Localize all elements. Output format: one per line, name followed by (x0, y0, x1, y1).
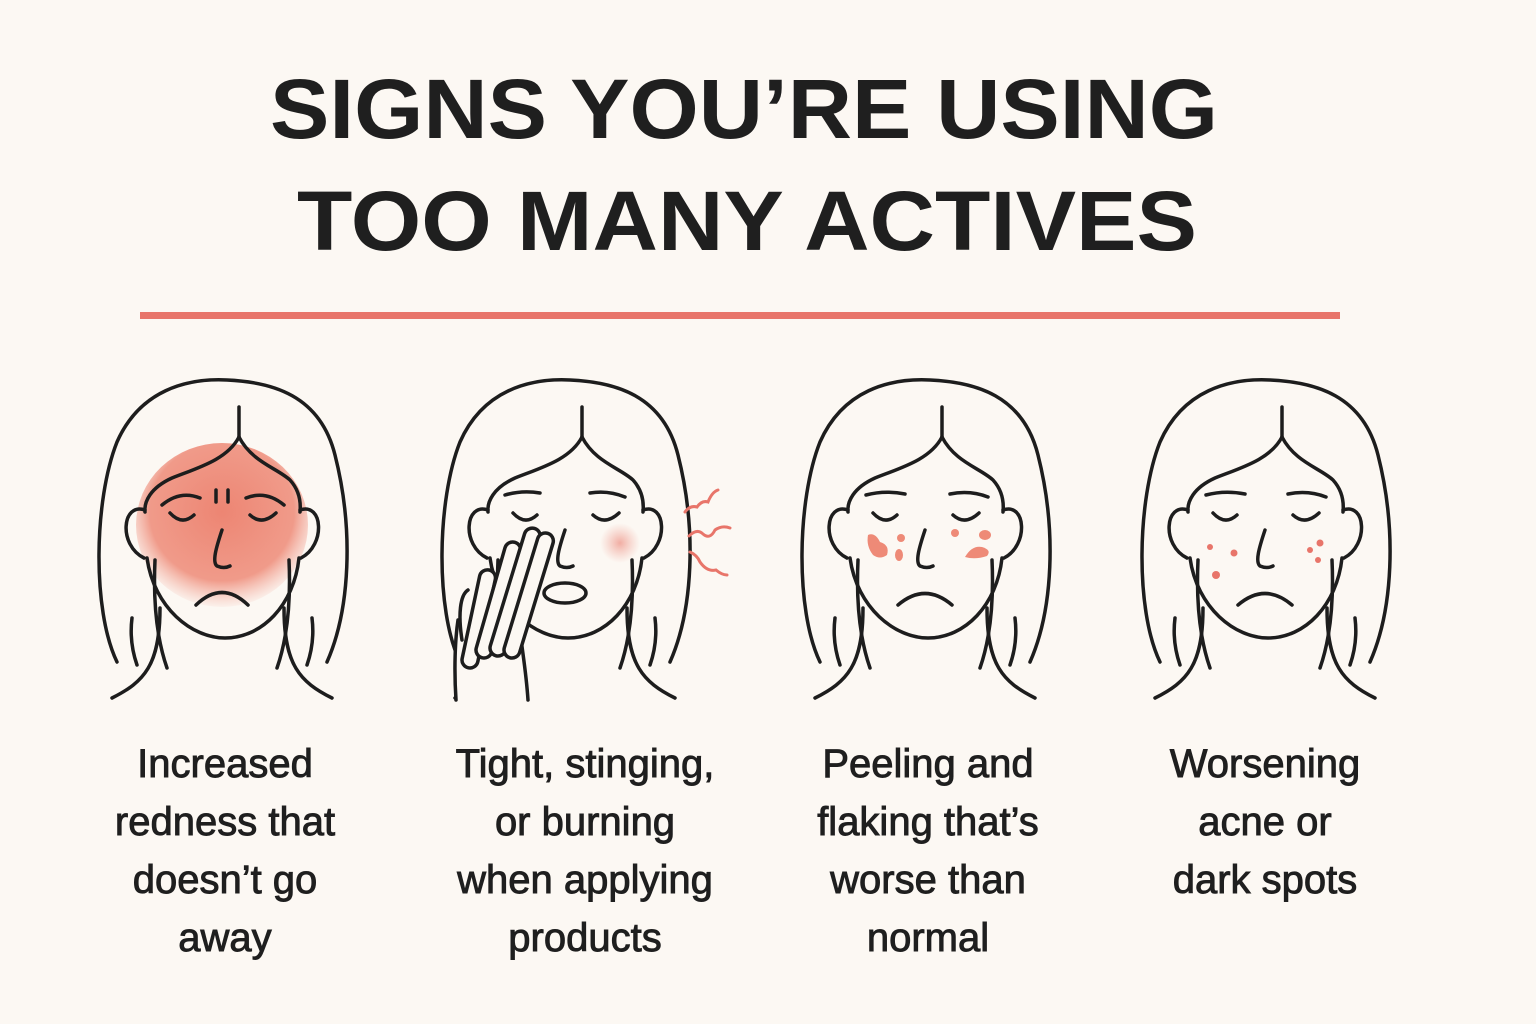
caption: redness that (115, 800, 335, 844)
divider line (140, 312, 1340, 319)
panel: stinging (442, 380, 730, 960)
caption: worse than (829, 858, 1026, 902)
caption: flaking that’s (817, 800, 1039, 844)
caption (115, 742, 335, 960)
icon: sting squiggles (685, 490, 730, 575)
caption: normal (867, 916, 989, 960)
acne dots (1207, 540, 1324, 579)
caption: away (178, 916, 272, 960)
caption: dark spots (1173, 858, 1357, 902)
flaking patches (868, 529, 991, 561)
title: TOO MANY ACTIVES (297, 174, 1197, 268)
caption (1170, 742, 1360, 902)
panel: redness (99, 380, 347, 960)
caption: Increased (137, 742, 313, 786)
caption: doesn’t go (133, 858, 317, 902)
icon: hand (455, 526, 555, 700)
caption: Worsening (1170, 742, 1360, 786)
blush (600, 523, 640, 563)
caption (456, 742, 714, 960)
caption: when applying (456, 858, 713, 902)
caption: Tight, stinging, (456, 742, 714, 786)
caption: Peeling and (822, 742, 1034, 786)
redness overlay (136, 443, 308, 607)
caption (817, 742, 1039, 960)
caption: products (508, 916, 662, 960)
caption: acne or (1198, 800, 1332, 844)
panel: peeling (802, 380, 1050, 960)
title: SIGNS YOU’RE USING (270, 62, 1218, 156)
caption: or burning (495, 800, 675, 844)
furrowed brows (162, 490, 284, 605)
panel: acne (1142, 380, 1390, 902)
title (270, 62, 1218, 268)
